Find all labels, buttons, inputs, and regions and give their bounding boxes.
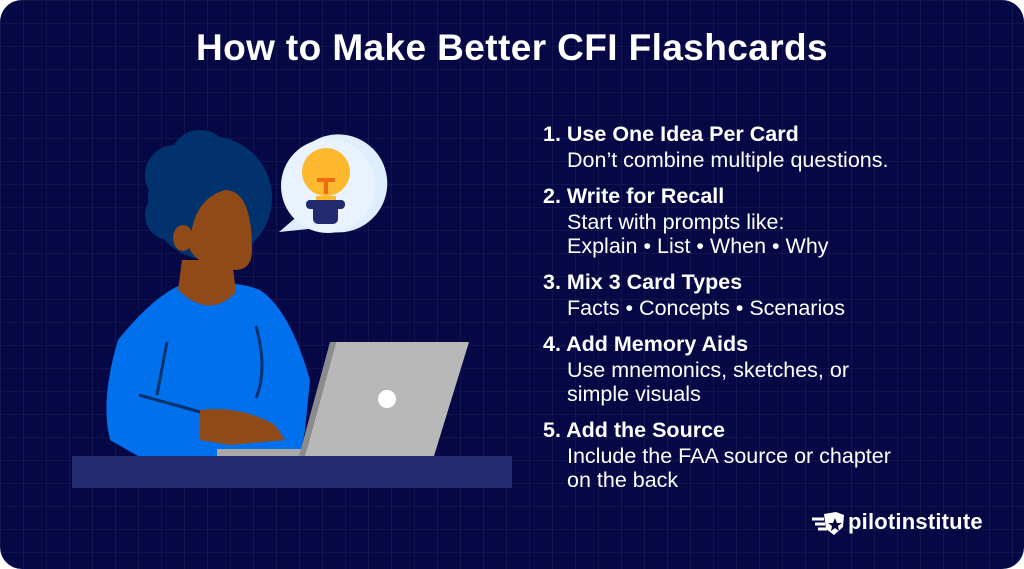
tip 5: 5. Add the Source xyxy=(543,418,725,442)
list of tips xyxy=(543,122,891,492)
illustration: woman at laptop xyxy=(72,130,512,488)
tip 4: simple visuals xyxy=(567,382,701,406)
person xyxy=(106,130,310,456)
tip 5 xyxy=(543,418,891,492)
desk xyxy=(72,456,512,488)
tip 1: Don’t combine multiple questions. xyxy=(567,148,888,172)
tip 1 xyxy=(543,122,888,172)
laptop xyxy=(217,342,469,456)
tip 4: Use mnemonics, sketches, or xyxy=(567,358,849,382)
title: How to Make Better CFI Flashcards xyxy=(196,27,828,68)
tip 3: Facts • Concepts • Scenarios xyxy=(567,296,845,320)
tip 2: 2. Write for Recall xyxy=(543,184,724,208)
tip 3: 3. Mix 3 Card Types xyxy=(543,270,742,294)
tip 5: Include the FAA source or chapter xyxy=(567,444,891,468)
tip 2 xyxy=(543,184,829,258)
tip 2: Explain • List • When • Why xyxy=(567,234,829,258)
tip 1: 1. Use One Idea Per Card xyxy=(543,122,799,146)
icon: speech bubble with lightbulb xyxy=(279,134,387,233)
logo: pilotinstitute: pilotinstitute xyxy=(848,509,983,534)
tip 4 xyxy=(543,332,849,406)
tip 4: 4. Add Memory Aids xyxy=(543,332,748,356)
tip 2: Start with prompts like: xyxy=(567,210,784,234)
tip 5: on the back xyxy=(567,468,678,492)
tip 3 xyxy=(543,270,845,320)
